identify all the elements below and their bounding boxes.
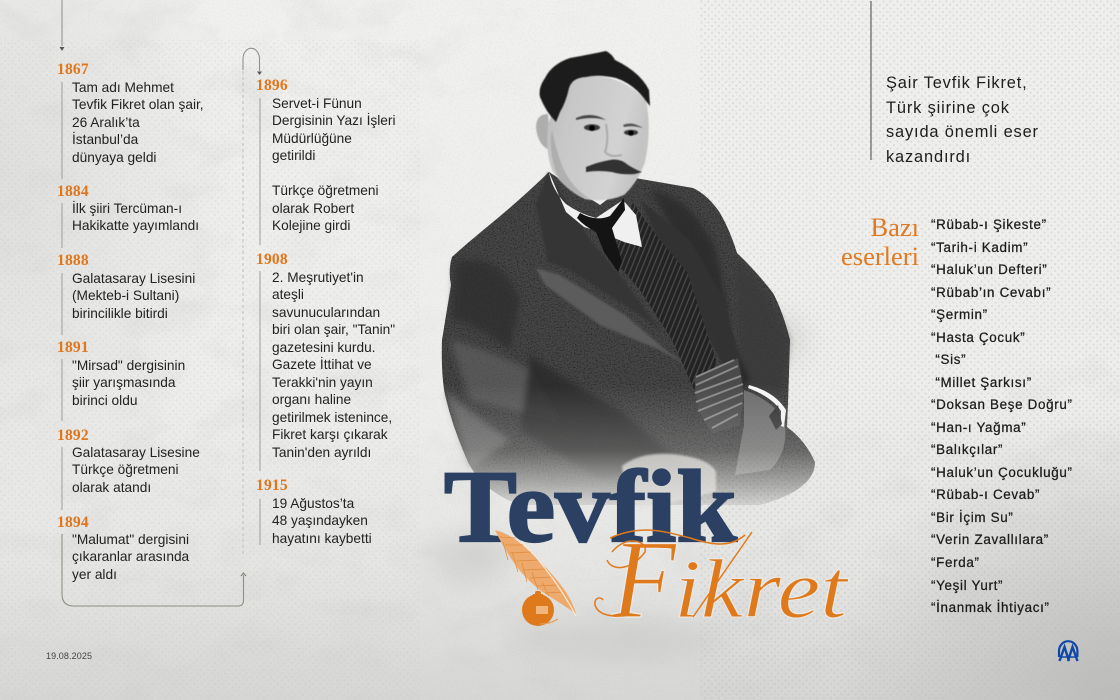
text: Servet-i Fünun Dergisinin Yazı İşleri Müdürlüğüne getirildi Türkçe öğretmeni olarak Robert Kolejine girdi <box>272 96 396 233</box>
arrow: timeline entry from top <box>60 0 64 51</box>
face <box>536 76 649 200</box>
timeline column two <box>256 77 396 546</box>
sleeve cuff stripes <box>694 358 744 434</box>
text: 1908 <box>256 251 288 268</box>
coat <box>442 172 815 505</box>
text: İlk şiiri Tercüman-ı Hakikatte yayımlandı <box>72 201 199 233</box>
dotted connector with top loop arrow <box>243 48 262 554</box>
portrait of Tevfik Fikret <box>442 50 815 505</box>
bottom connector arrow <box>62 534 246 606</box>
hair <box>540 51 650 122</box>
date: 19.08.2025 <box>46 651 92 661</box>
icon: feather quill <box>495 530 576 616</box>
1888 entry <box>57 252 195 321</box>
1891 entry <box>57 339 185 408</box>
text: 1892 <box>57 427 89 444</box>
text: 1888 <box>57 252 89 269</box>
intro text: Şair Tevfik Fikret, Türk şiirine çok sayıda önemli eser kazandırdı <box>886 74 1039 166</box>
title: Tevfik: Tevfik <box>444 450 738 564</box>
moustache <box>586 160 642 174</box>
1894 entry <box>57 514 190 582</box>
1892 entry <box>57 427 200 495</box>
title: Fikret: F <box>611 518 677 642</box>
text: 2. Meşrutiyet'in ateşli savunucularından biri olan şair, "Tanin" gazetesini kurdu. Gazete İttihat ve Terakki'nin yayın organı haline getirilmek istenince, Fikret karşı çıkarak Tanin'den ayrıldı <box>272 270 395 460</box>
title: Fikret <box>595 518 850 642</box>
text: "Mirsad" dergisinin şiir yarışmasında birinci oldu <box>72 358 185 408</box>
shirt cuff and hand <box>735 385 786 475</box>
title: Fikret: ikret <box>674 543 850 636</box>
text: 1896 <box>256 77 288 94</box>
text: Tam adı Mehmet Tevfik Fikret olan şair, 26 Aralık’ta İstanbul’da dünyaya geldi <box>72 80 204 165</box>
text: 1894 <box>57 514 89 531</box>
text: 1915 <box>256 477 288 494</box>
waistcoat with stripes <box>612 203 716 392</box>
heading: some works <box>841 212 919 271</box>
hand behind the title <box>622 454 716 510</box>
1908 entry <box>256 251 395 460</box>
necktie <box>577 198 625 272</box>
shirt collar <box>549 172 642 247</box>
timeline column one <box>57 61 204 582</box>
text: Galatasaray Lisesini (Mekteb-i Sultani) birincilikle bitirdi <box>72 271 195 321</box>
list of works: “Rübab-ı Şikeste” “Tarih-i Kadim” “Haluk’un Defteri” “Rübab’ın Cevabı” “Şermin” “Hasta Çocuk” “Sis” “Millet Şarkısı” “Doksan Beşe Doğru” “Han-ı Yağma” “Balıkçılar” “Haluk’un Çocukluğu” “Rübab-ı Cevab” “Bir İçim Su” “Verin Zavallılara” “Ferda” “Yeşil Yurt” “İnanmak İhtiyacı” <box>931 217 1073 615</box>
coat shading <box>445 190 788 480</box>
text: "Malumat" dergisini çıkaranlar arasında yer aldı <box>72 532 189 582</box>
text: 1867 <box>57 61 89 78</box>
1884 entry <box>57 183 199 233</box>
1867 entry <box>57 61 204 165</box>
heading: some works: Bazı <box>870 212 919 242</box>
1896 entry <box>256 77 396 233</box>
eyebrows and eyes <box>576 115 643 156</box>
text: Galatasaray Lisesine Türkçe öğretmeni olarak atandı <box>72 445 200 495</box>
text: 1891 <box>57 339 89 356</box>
coat lapels <box>536 172 745 395</box>
text: 1884 <box>57 183 89 200</box>
heading: some works: eserleri <box>841 241 919 271</box>
text: 19 Ağustos’ta 48 yaşındayken hayatını kaybetti <box>272 496 372 546</box>
middle timeline segments <box>259 98 261 545</box>
left timeline segments <box>61 82 63 510</box>
1915 entry <box>256 477 372 546</box>
icon: ink bottle <box>522 591 558 626</box>
